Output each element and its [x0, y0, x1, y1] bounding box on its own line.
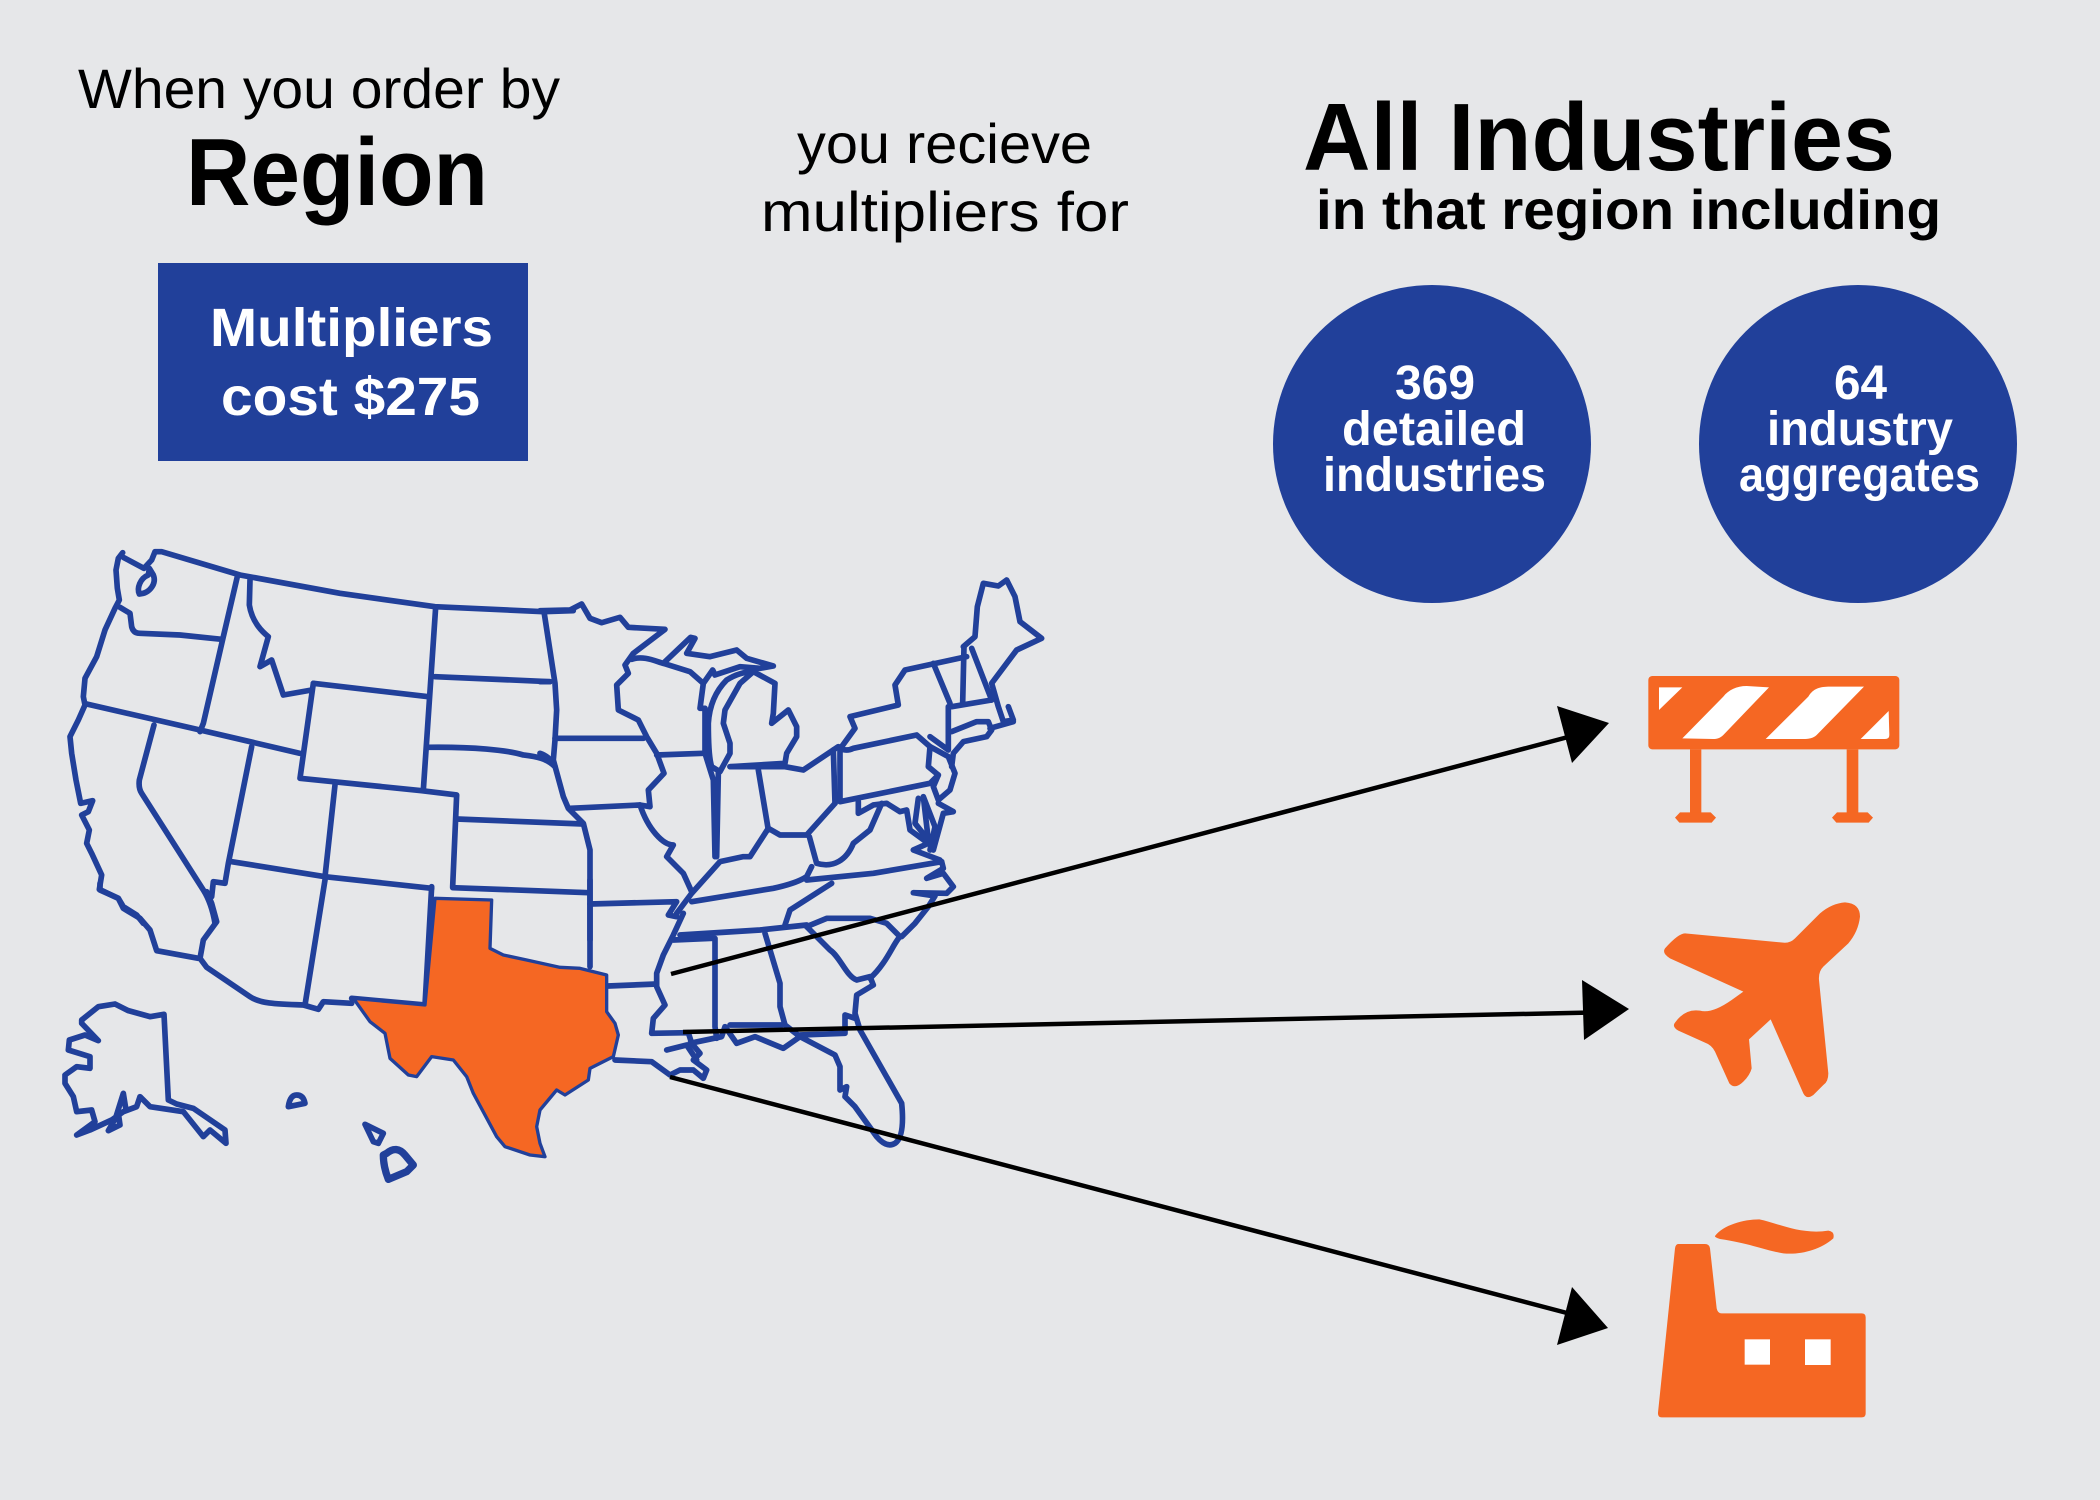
circle: 369 detailed industries — [1273, 285, 1591, 603]
icon: factory — [1658, 1219, 1866, 1417]
circle: 64 industry aggregates: aggregates — [1739, 449, 1980, 502]
heading: all industries in that region including: All Industries — [1303, 84, 1895, 191]
map: United States with Texas highlighted — [65, 552, 1042, 1179]
map: western states — [70, 552, 588, 923]
price box: multipliers cost $275: cost $275 — [221, 367, 480, 427]
map: Texas highlighted — [353, 898, 618, 1157]
circle: 64 industry aggregates: 64 — [1834, 357, 1887, 410]
circle: 369 detailed industries: industries — [1323, 449, 1546, 502]
heading: all industries in that region including — [1303, 84, 1941, 241]
heading: you recieve multipliers for: you recieve — [797, 112, 1092, 175]
heading: you recieve multipliers for: multipliers for — [761, 180, 1129, 243]
map: southwestern states and Alaska — [65, 880, 432, 1179]
circle: 369 detailed industries: 369 — [1395, 357, 1475, 410]
map: southeastern states — [590, 880, 902, 1145]
arrow: map to factory — [670, 1077, 1608, 1345]
heading: when you order by region: When you order by — [78, 57, 560, 120]
heading: when you order by region: Region — [186, 119, 488, 226]
heading: when you order by region — [78, 57, 560, 226]
map: eastern and midwestern states — [540, 580, 1042, 940]
circle: 64 industry aggregates — [1699, 285, 2017, 603]
arrow: map to construction barrier — [671, 706, 1609, 974]
icon: airplane — [1664, 902, 1860, 1097]
arrow: map to airplane — [683, 980, 1629, 1040]
circle: 64 industry aggregates: industry — [1767, 403, 1953, 456]
heading: all industries in that region including: in that region including — [1316, 178, 1941, 241]
circle: 369 detailed industries: detailed — [1342, 403, 1526, 456]
price box: multipliers cost $275 — [158, 263, 528, 461]
heading: you recieve multipliers for — [761, 112, 1129, 243]
icon: construction barrier — [1648, 676, 1899, 823]
price box: multipliers cost $275: Multipliers — [210, 298, 493, 358]
